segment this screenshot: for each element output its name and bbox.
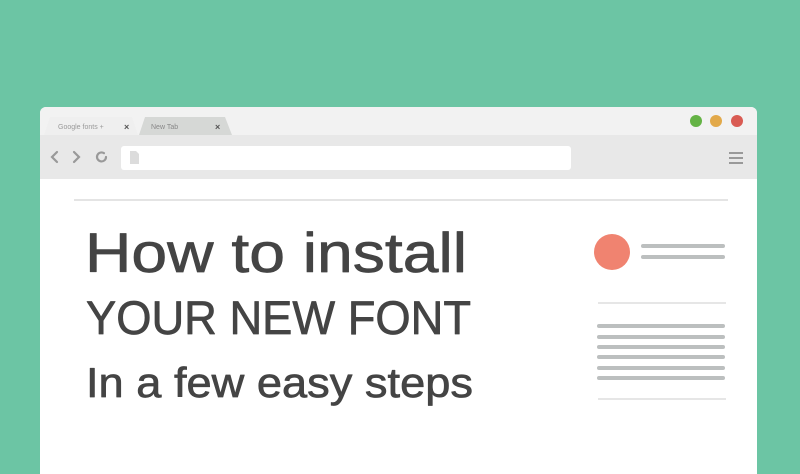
sidebar mockup [594, 234, 726, 399]
tagline: In a few easy steps [86, 359, 473, 406]
tab bar [40, 107, 757, 135]
title [85, 221, 473, 406]
tab: Google fonts: × [124, 122, 129, 132]
address bar [121, 146, 571, 170]
icon: menu [729, 153, 743, 163]
tab: New Tab: × [215, 122, 220, 132]
tab: New Tab: New Tab [151, 124, 178, 131]
browser window [40, 107, 757, 474]
avatar circle [594, 234, 630, 270]
title: How to install [85, 221, 467, 284]
tab: New Tab [139, 117, 232, 135]
icon: back/forward/reload [52, 152, 106, 162]
toolbar [40, 135, 757, 179]
tab: Google fonts: Google fonts + [58, 124, 104, 131]
tab: Google fonts [44, 117, 138, 135]
text lines [599, 326, 723, 378]
window controls [690, 115, 743, 127]
subtitle: YOUR NEW FONT [86, 291, 471, 344]
